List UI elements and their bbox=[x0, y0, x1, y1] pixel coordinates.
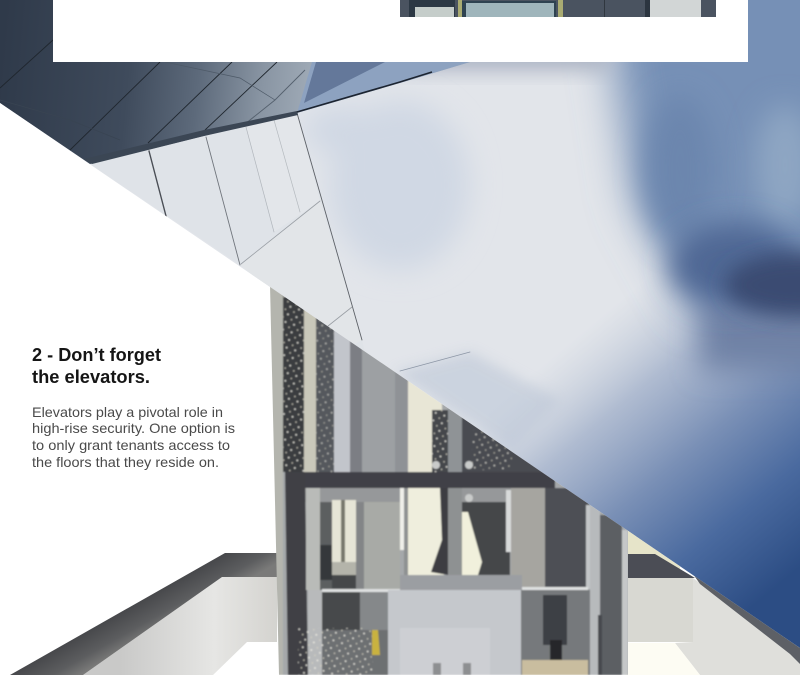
lower dark column bbox=[285, 472, 308, 675]
right upper window bbox=[626, 530, 680, 569]
horizontal dark beam bbox=[305, 472, 555, 488]
building photo strip bbox=[400, 0, 716, 17]
sky: dark blue shadow bbox=[725, 253, 800, 317]
right floor bbox=[625, 643, 700, 675]
lower left panels bbox=[308, 590, 322, 675]
sky: tint below facade line bbox=[401, 351, 552, 444]
grey translucent band bbox=[320, 488, 511, 502]
door studs bbox=[432, 461, 440, 469]
left glass edge bbox=[270, 287, 284, 675]
sky: lower blue gradient bbox=[494, 293, 800, 648]
glass facets bbox=[256, 277, 270, 287]
sky: blue right side bbox=[595, 0, 800, 330]
right rail bbox=[693, 574, 800, 664]
elevator cage bbox=[268, 285, 630, 675]
lower left zone bbox=[306, 488, 320, 590]
dark door panel bbox=[462, 502, 510, 575]
heading: the elevators. bbox=[32, 367, 150, 387]
blue roof corner bbox=[297, 62, 480, 113]
photo: elevator shaft and railings bbox=[10, 285, 800, 675]
lower centre pale panel bbox=[388, 590, 521, 675]
horizontal rods bbox=[322, 589, 400, 592]
dark roof panels bbox=[0, 0, 500, 170]
sky: upper-right pale streak bbox=[755, 105, 800, 225]
right far wall bbox=[675, 578, 800, 675]
right wall bbox=[628, 578, 693, 642]
heading bbox=[32, 345, 161, 387]
left railing top bbox=[10, 553, 277, 675]
body text: the floors that they reside on. bbox=[32, 454, 219, 470]
cream door panel bbox=[408, 488, 444, 575]
lower right interior bbox=[521, 590, 599, 675]
sky: blue fade below shadow bbox=[700, 300, 800, 370]
facet lines bbox=[149, 113, 470, 371]
sky: grey band under card bbox=[413, 62, 608, 80]
roof edge bbox=[84, 111, 298, 164]
roof panel seams bbox=[0, 40, 305, 150]
body text bbox=[32, 404, 235, 470]
right dark band bbox=[628, 554, 695, 578]
body text: high-rise security. One option is bbox=[32, 420, 235, 436]
clouds on glass bbox=[303, 100, 470, 270]
sky: mid shadow bbox=[670, 223, 800, 307]
heading: 2 - Don’t forget bbox=[32, 345, 161, 365]
upper shaft panels bbox=[316, 310, 334, 472]
body text: to only grant tenants access to bbox=[32, 437, 230, 453]
cream column bbox=[304, 285, 316, 472]
door sill bbox=[400, 575, 522, 590]
sky: darker blue column bbox=[645, 95, 715, 245]
upper window bbox=[408, 380, 442, 472]
body text: Elevators play a pivotal role in bbox=[32, 404, 223, 420]
left railing wall bbox=[83, 577, 277, 675]
right cage panels bbox=[590, 500, 600, 675]
white title card bbox=[53, 0, 748, 62]
upper dark column bbox=[283, 285, 304, 472]
upper dark panel bbox=[461, 418, 543, 473]
